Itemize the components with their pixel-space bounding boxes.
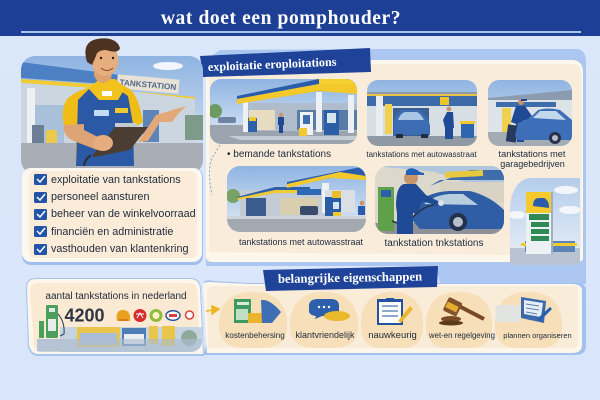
caption: garagebedrijven xyxy=(500,159,565,169)
checklist item: personeel aansturen xyxy=(51,191,149,203)
item: plannen organiseren xyxy=(495,292,572,348)
caption: tankstation tnkstations xyxy=(385,238,483,249)
heading: aantal tankstations in nederland xyxy=(45,291,187,302)
number: 4200 xyxy=(64,306,105,326)
arrow xyxy=(206,306,219,314)
ribbon: exploitatie xyxy=(200,48,371,77)
panel: belangrijke eigenschappen xyxy=(203,266,586,355)
checklist item: vasthouden van klantenkring xyxy=(51,243,188,255)
item: nauwkeurig: nauwkeurig xyxy=(368,330,417,341)
checklist item: beheer van de winkelvoorraad xyxy=(51,208,196,220)
header banner xyxy=(0,0,600,36)
caption: tankstations met autowasstraat xyxy=(239,237,364,247)
ribbon: eigenschappen xyxy=(263,266,438,291)
caption: • bemande tankstations xyxy=(227,149,331,160)
item: kostenbeheersing: kostenbehersing xyxy=(225,331,285,340)
decorative hose with arrow xyxy=(209,145,220,195)
brand logos xyxy=(117,309,194,322)
item: wet- en regelgeving: wet-en regelgeving xyxy=(428,331,495,340)
panel: person with station background xyxy=(21,38,203,265)
photo: autowasstraat 2 xyxy=(226,166,366,232)
panel: aantal tankstations xyxy=(26,278,204,356)
photo: tanken xyxy=(375,166,504,234)
title: wat doet een pomphouder? xyxy=(161,8,401,29)
item: klantvriendelijk xyxy=(290,292,358,348)
item: kostenbeheersing xyxy=(219,292,287,348)
caption: tankstations met autowasstraat xyxy=(366,150,477,159)
photo: autowasstraat xyxy=(367,80,477,146)
icon: pump xyxy=(37,305,64,351)
figure: pomphouder xyxy=(63,38,186,166)
checklist item: exploitatie van tankstations xyxy=(51,174,181,186)
panel: main exploitation xyxy=(200,48,586,284)
item: plannen organiseren: plannen organiseren xyxy=(503,331,572,340)
checklist item: financiën en administratie xyxy=(51,226,173,238)
sign: tankstation xyxy=(117,74,179,94)
caption: tankstations met xyxy=(499,149,566,159)
photo: bemande tankstations xyxy=(208,79,357,144)
item: wet- en regelgeving xyxy=(426,292,495,348)
photo: prijsbord xyxy=(509,178,581,265)
sign: tankstation: TANKSTATION xyxy=(119,78,177,92)
item: nauwkeurig xyxy=(361,292,423,348)
photo: garagebedrijven xyxy=(488,80,572,146)
ribbon: exploitatie: exploitatie eroploitations xyxy=(208,55,337,74)
ribbon: eigenschappen: belangrijke eigenschappen xyxy=(278,269,422,286)
panel: checklist xyxy=(22,168,203,265)
item: klantvriendelijk: klantvriendelijk xyxy=(295,330,355,340)
